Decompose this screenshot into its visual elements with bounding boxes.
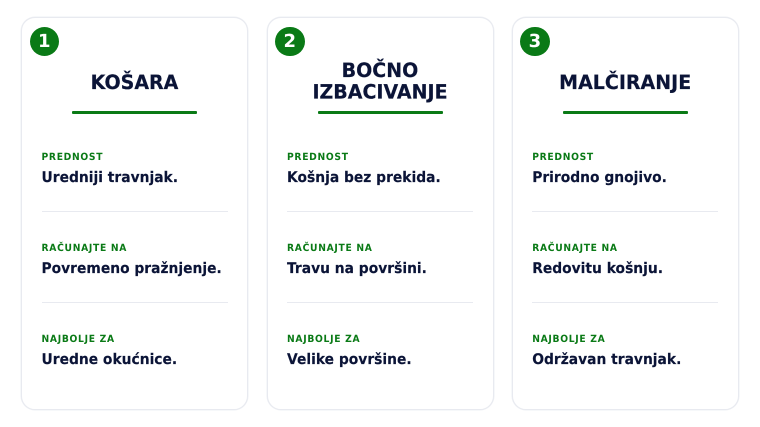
panel: card 2 bočno izbacivanje	[266, 17, 494, 410]
heading underline	[318, 111, 442, 114]
text: prednost value: Prirodno gnojivo.	[532, 169, 667, 186]
label: računajte na: RAČUNAJTE NA	[532, 243, 618, 254]
badge 2: 2	[283, 30, 296, 52]
label: računajte na: RAČUNAJTE NA	[42, 243, 127, 254]
heading: bočno izbacivanje	[312, 58, 448, 104]
section: računajte na	[287, 242, 427, 277]
text: najbolje za value: Održavan travnjak.	[532, 351, 681, 368]
text: prednost value: Košnja bez prekida.	[287, 169, 441, 186]
label: prednost: PREDNOST	[42, 152, 103, 163]
badge 1	[30, 26, 59, 56]
section: prednost	[287, 152, 441, 186]
heading: malčiranje: MALČIRANJE	[559, 71, 691, 94]
label: prednost: PREDNOST	[287, 152, 349, 163]
badge 3: 3	[529, 30, 541, 52]
section: najbolje za	[532, 334, 681, 368]
section: najbolje za	[42, 334, 177, 368]
badge 1: 1	[38, 30, 51, 52]
text: najbolje za value: Velike površine.	[287, 351, 412, 368]
panel: card 1 košara	[21, 17, 248, 410]
label: najbolje za: NAJBOLJE ZA	[287, 334, 360, 345]
label: računajte na: RAČUNAJTE NA	[287, 243, 373, 254]
heading: bočno izbacivanje: IZBACIVANJE	[312, 81, 448, 104]
text: računajte na value: Povremeno pražnjenje.	[42, 260, 222, 277]
heading underline	[563, 111, 688, 114]
label: najbolje za: NAJBOLJE ZA	[532, 334, 605, 345]
text: najbolje za value: Uredne okućnice.	[42, 351, 177, 368]
label: prednost: PREDNOST	[532, 152, 594, 163]
heading: bočno izbacivanje: BOČNO	[342, 59, 418, 82]
badge 2	[275, 26, 304, 56]
section: računajte na	[42, 242, 222, 277]
text: računajte na value: Redovitu košnju.	[532, 260, 663, 277]
heading: košara: KOŠARA	[91, 71, 178, 94]
section: računajte na	[532, 242, 663, 277]
text: prednost value: Uredniji travnjak.	[42, 169, 178, 186]
section: najbolje za	[287, 334, 412, 368]
panel: card 3 malčiranje	[512, 17, 739, 410]
section: prednost	[532, 152, 667, 186]
label: najbolje za: NAJBOLJE ZA	[42, 334, 115, 345]
heading underline	[72, 111, 197, 114]
text: računajte na value: Travu na površini.	[287, 260, 427, 277]
section: prednost	[42, 152, 178, 186]
badge 3	[520, 26, 550, 56]
